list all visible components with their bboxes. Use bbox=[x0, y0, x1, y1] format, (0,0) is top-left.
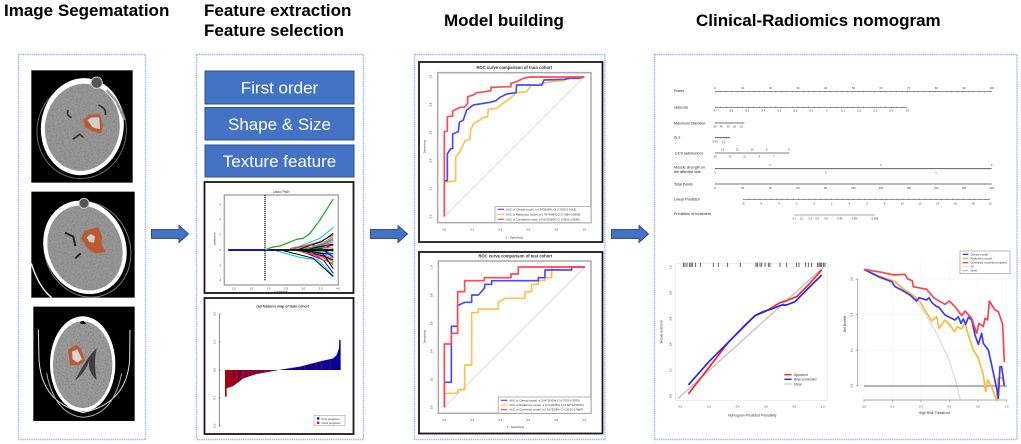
chart: ROC test cohort: 0.0 bbox=[442, 418, 447, 422]
feature box: shape and size bbox=[205, 108, 354, 140]
chart: nomogram: 6 bbox=[866, 201, 868, 205]
chart: ROC train cohort: 0.6 bbox=[429, 130, 433, 135]
chart: lasso path: 2.0 bbox=[267, 286, 271, 290]
chart: decision curve: 0.2 bbox=[890, 404, 895, 408]
chart: ROC test cohort: ROC curve comparison of test cohort bbox=[478, 254, 553, 259]
chart: ROC test cohort: 1.0 bbox=[582, 418, 587, 422]
chart: decision curve: All bbox=[970, 265, 974, 269]
chart: nomogram: 10 bbox=[740, 124, 743, 128]
chart: ROC test cohort: 0.8 bbox=[554, 418, 559, 422]
feature box: shape and size: Shape & Size bbox=[228, 115, 331, 134]
chart: nomogram: 40 bbox=[824, 86, 828, 90]
chart: nomogram: 0.999 bbox=[872, 216, 879, 220]
chart: nomogram: -0.1 bbox=[809, 109, 814, 113]
chart: nomogram: the affected side bbox=[674, 170, 701, 174]
chart: calibration curve: 0.2 bbox=[707, 404, 711, 408]
chart: nomogram: 120 bbox=[879, 186, 884, 190]
chart: decision curve: Radiomics model bbox=[970, 257, 992, 261]
chart: ROC train cohort: 1.0 bbox=[582, 227, 587, 231]
chart: nomogram: 0 bbox=[991, 163, 993, 167]
chart: nomogram: 9 bbox=[759, 155, 761, 159]
chart: calibration curve: 0.0 bbox=[678, 404, 683, 408]
chart: ROC train cohort: Sensitivity bbox=[422, 139, 426, 153]
chart: lasso path: Lasso Path bbox=[273, 190, 289, 194]
chart: decision curve: Net Benefit bbox=[843, 316, 847, 332]
chart: ROC train cohort: 1.0 bbox=[429, 74, 433, 79]
chart: nomogram: 0.3 bbox=[873, 109, 877, 113]
chart: nomogram: 0.99 bbox=[852, 216, 857, 220]
title: model building: Model building bbox=[444, 11, 564, 30]
chart: nomogram: 12 bbox=[736, 147, 739, 151]
chart: decision curve: 0.4 bbox=[919, 404, 923, 408]
chart: lasso path: 3.0 bbox=[301, 286, 306, 290]
chart: nomogram: 0 bbox=[714, 86, 716, 90]
chart: nomogram: 14 bbox=[721, 147, 725, 151]
chart: calibration curve: Ideal bbox=[794, 382, 802, 386]
chart: lasso path: coefficients bbox=[212, 232, 216, 246]
chart: calibration curve: 0.4 bbox=[736, 404, 740, 408]
chart: decision curve bbox=[843, 251, 1010, 415]
chart: lasso path: 3.5 bbox=[319, 286, 323, 290]
CT scan 3 bbox=[33, 307, 135, 421]
chart: ROC test cohort: 0.0 bbox=[429, 405, 433, 409]
chart: calibration curve: 0.2 bbox=[669, 368, 673, 372]
chart: nomogram: 12 bbox=[918, 201, 922, 205]
chart: nomogram: 0.1 bbox=[792, 216, 797, 220]
chart: nomogram: -0.4 bbox=[761, 109, 766, 113]
feature box: texture feature: Texture feature bbox=[223, 152, 336, 171]
chart: rad features map: rad features map of train cohort bbox=[256, 305, 310, 309]
chart: lasso path: -2 bbox=[219, 263, 222, 267]
chart: lasso path bbox=[204, 182, 354, 294]
chart: nomogram: 0 bbox=[826, 109, 828, 113]
chart: calibration curve: Actual outcome bbox=[659, 320, 663, 343]
chart: nomogram: 160 bbox=[934, 186, 939, 190]
chart: nomogram: 50 bbox=[852, 86, 855, 90]
chart: nomogram: 0.2 bbox=[800, 216, 804, 220]
chart: rad features map: -0.2 bbox=[212, 423, 216, 428]
chart: decision curve: 0.0 bbox=[862, 404, 866, 408]
chart: nomogram: 16 bbox=[954, 201, 957, 205]
chart: ROC train cohort: AUC of Clinical model: a 0.8439(95% CI 0.7910-0.9165) bbox=[506, 207, 576, 211]
chart: nomogram: 8 bbox=[884, 201, 886, 205]
chart: ROC test cohort: 0.6 bbox=[526, 418, 531, 422]
chart: ROC test cohort: 0.4 bbox=[429, 349, 433, 353]
chart: nomogram: Points bbox=[674, 89, 684, 93]
chart: nomogram: 2 bbox=[880, 163, 882, 167]
chart: decision curve: 0.2 bbox=[849, 348, 853, 352]
chart: calibration curve: 0.6 bbox=[764, 404, 768, 408]
chart: lasso path: 2 bbox=[219, 233, 221, 237]
chart: nomogram: 200 bbox=[989, 186, 994, 190]
chart: nomogram: Linear Predictor bbox=[674, 198, 701, 202]
chart: nomogram: 0.5 bbox=[905, 109, 910, 113]
chart: calibration curve: 0.8 bbox=[792, 404, 797, 408]
chart: decision curve: 0.4 bbox=[849, 312, 853, 317]
arrow: segmentation to features bbox=[152, 226, 188, 242]
chart: lasso path: 0 bbox=[219, 248, 221, 252]
chart: nomogram: 0 bbox=[714, 186, 716, 190]
chart: nomogram: 14 bbox=[936, 201, 940, 205]
chart: rad features map: -0.1 bbox=[212, 395, 216, 400]
chart: ROC test cohort: AUC of Clinical model: a 0.8475(95% CI 0.7570-0.9520) bbox=[509, 398, 580, 402]
chart: ROC test cohort: Sensitivity bbox=[423, 329, 427, 343]
panel: clinical-radiomics nomogram bbox=[654, 54, 1017, 440]
chart: ROC test cohort: AUC of Radiomics model: a 0.7743(95% CI 0.6872-0.8676) bbox=[509, 403, 584, 407]
chart: calibration curve: 0.4 bbox=[669, 342, 673, 346]
chart: nomogram: 0.95 bbox=[837, 216, 843, 220]
chart: calibration curve: 1.0 bbox=[821, 404, 825, 408]
chart: rad features map: 0.2 bbox=[212, 312, 216, 316]
chart: ROC test cohort bbox=[419, 252, 602, 434]
chart: nomogram: 80 bbox=[935, 86, 938, 90]
chart: nomogram: -2 bbox=[795, 201, 798, 205]
CT scan 1 bbox=[31, 70, 133, 184]
chart: nomogram: 1 bbox=[935, 170, 937, 174]
chart: ROC train cohort: ROC curve comparison of train cohort bbox=[477, 65, 553, 70]
chart: nomogram: 0.4 bbox=[808, 216, 813, 220]
chart: calibration curve: Apparent bbox=[794, 373, 808, 377]
chart: ROC train cohort: 0.4 bbox=[429, 158, 433, 163]
chart: ROC train cohort bbox=[419, 62, 602, 242]
chart: ROC test cohort: 0.6 bbox=[429, 321, 433, 325]
feature box: texture feature bbox=[205, 145, 354, 177]
chart: decision curve: 0.6 bbox=[947, 404, 952, 408]
chart: nomogram: Maximum Diameter bbox=[674, 121, 706, 125]
arrow: model to nomogram bbox=[612, 226, 648, 242]
chart: decision curve: 0.6 bbox=[849, 277, 853, 281]
chart: ROC train cohort: AUC of Combined model: a 0.9225(95% CI 0.8811-0.9645) bbox=[506, 217, 580, 221]
chart: ROC train cohort: 0.4 bbox=[498, 227, 503, 231]
chart: nomogram: 90 bbox=[962, 86, 966, 90]
chart: lasso path: 1.5 bbox=[249, 286, 254, 290]
chart: nomogram: 4 bbox=[769, 163, 771, 167]
chart: nomogram: 40 bbox=[769, 186, 772, 190]
chart: nomogram bbox=[674, 86, 994, 220]
chart: nomogram: 180 bbox=[962, 186, 967, 190]
chart: nomogram: 20 bbox=[733, 124, 737, 128]
chart: nomogram: -0.5 bbox=[745, 109, 750, 113]
chart: lasso path: 4 bbox=[219, 218, 221, 222]
chart: ROC train cohort: 1 - Specificity bbox=[505, 236, 524, 240]
chart: decision curve: Combined model(nomogram) bbox=[970, 261, 1007, 265]
chart: nomogram: 0.08 bbox=[712, 139, 718, 143]
chart: nomogram: 20 bbox=[769, 86, 772, 90]
chart: calibration curve: Bias-corrected bbox=[794, 378, 817, 382]
chart: calibration curve: 0.8 bbox=[669, 291, 673, 295]
chart: nomogram: -0.7 bbox=[713, 109, 718, 113]
chart: rad features map: Good prognosis bbox=[322, 421, 341, 425]
chart: nomogram: Muscle strength on bbox=[674, 166, 705, 170]
chart: decision curve: None bbox=[970, 269, 978, 273]
chart: ROC test cohort: 0.2 bbox=[470, 418, 475, 422]
chart: nomogram: -0.3 bbox=[777, 109, 782, 113]
chart: nomogram: 18 bbox=[971, 201, 975, 205]
chart: rad features map bbox=[204, 298, 354, 434]
chart: lasso path: Log(lambda) bbox=[274, 291, 288, 294]
chart: nomogram: 30 bbox=[797, 86, 800, 90]
arrow: features to model bbox=[370, 226, 408, 242]
chart: nomogram: -6 bbox=[760, 201, 763, 205]
chart: nomogram: 10 bbox=[751, 147, 754, 151]
chart: ROC train cohort: 0.0 bbox=[429, 214, 433, 219]
chart: rad features map: 0.0 bbox=[212, 368, 216, 372]
title: image segmentation: Image Segematation bbox=[4, 1, 169, 20]
chart: nomogram: -4 bbox=[777, 201, 780, 205]
chart: calibration curve: 1.0 bbox=[669, 265, 673, 269]
title: feature extraction and selection: Feature selection bbox=[204, 21, 344, 40]
chart: rad features map: Poor prognosis bbox=[322, 417, 340, 421]
chart: decision curve: Clinical model bbox=[970, 252, 988, 256]
chart: nomogram: -8 bbox=[742, 201, 745, 205]
feature box: first order bbox=[205, 71, 354, 104]
chart: ROC test cohort: 0.8 bbox=[429, 293, 433, 297]
chart: lasso path: 2.5 bbox=[284, 286, 288, 290]
chart: nomogram: 7 bbox=[773, 155, 775, 159]
chart: nomogram: -0.6 bbox=[729, 109, 734, 113]
chart: nomogram: 60 bbox=[797, 186, 800, 190]
chart: ROC test cohort: 1 - Specificity bbox=[506, 425, 525, 429]
chart: nomogram: radscore bbox=[674, 105, 688, 109]
chart: ROC train cohort: 0.2 bbox=[470, 227, 475, 231]
chart: lasso path: 4.0 bbox=[336, 286, 340, 290]
chart: nomogram: 80 bbox=[824, 186, 828, 190]
chart: nomogram: 100 bbox=[989, 86, 994, 90]
panel: image segmentation bbox=[18, 54, 146, 440]
chart: decision curve: High Risk Threshold bbox=[919, 411, 950, 415]
title: feature extraction and selection: Feature extraction bbox=[204, 1, 351, 20]
chart: ROC test cohort: 1.0 bbox=[429, 265, 433, 269]
chart: ROC train cohort: AUC of Radiomics model: a 0.7874(95% CI 0.7084-0.8665) bbox=[506, 212, 580, 216]
chart: nomogram: Total Points bbox=[674, 182, 693, 186]
chart: nomogram: 30 bbox=[727, 124, 730, 128]
chart: nomogram: 140 bbox=[906, 186, 911, 190]
chart: nomogram: Prediction of treatment bbox=[674, 212, 711, 216]
chart: nomogram: 10 bbox=[901, 201, 904, 205]
chart: nomogram: 70 bbox=[907, 86, 911, 90]
chart: nomogram: 0.6 bbox=[815, 216, 820, 220]
chart: nomogram: 15 bbox=[714, 155, 717, 159]
chart: nomogram: 50 bbox=[714, 124, 717, 128]
chart: ROC test cohort: 0.4 bbox=[498, 418, 503, 422]
panel: feature extraction and selection bbox=[196, 54, 364, 440]
chart: nomogram: -0.2 bbox=[793, 109, 798, 113]
chart: nomogram: 40 bbox=[720, 124, 723, 128]
chart: nomogram: 5 bbox=[714, 170, 716, 174]
chart: nomogram: 5 bbox=[788, 147, 790, 151]
chart: lasso path: 1.0 bbox=[232, 286, 236, 290]
chart: nomogram: 0.1 bbox=[841, 109, 845, 113]
title: clinical-radiomics nomogram: Clinical-Radiomics nomogram bbox=[696, 11, 941, 30]
chart: nomogram: 0 bbox=[813, 201, 815, 205]
chart: decision curve: 0.0 bbox=[849, 383, 853, 388]
chart: decision curve: 0.8 bbox=[976, 404, 980, 408]
panel: model building bbox=[414, 54, 605, 440]
CT scan 2 bbox=[29, 188, 145, 310]
chart: nomogram: 60 bbox=[879, 86, 883, 90]
chart: lasso path: -4 bbox=[219, 278, 222, 282]
chart: calibration curve bbox=[659, 263, 827, 418]
chart: lasso path: 6 bbox=[219, 203, 221, 207]
chart: calibration curve: 0.0 bbox=[669, 394, 673, 398]
chart: nomogram: 2 bbox=[831, 201, 833, 205]
chart: calibration curve: 0.6 bbox=[669, 316, 673, 321]
chart: nomogram: 10 bbox=[741, 86, 745, 90]
chart: nomogram: PLT bbox=[674, 136, 681, 140]
chart: nomogram: 0.2 bbox=[857, 109, 861, 113]
chart: nomogram: 20 bbox=[741, 186, 745, 190]
chart: nomogram: GCS (admission) bbox=[675, 151, 703, 155]
chart: ROC test cohort: 0.2 bbox=[429, 377, 433, 381]
chart: calibration curve: Nomogram-Predicted Probability bbox=[728, 414, 777, 418]
chart: ROC train cohort: 0.8 bbox=[554, 227, 559, 231]
feature box: first order: First order bbox=[241, 78, 319, 98]
chart: ROC train cohort: 0.2 bbox=[429, 186, 433, 191]
chart: rad features map: 0.1 bbox=[212, 340, 216, 344]
chart: nomogram: 0.2 bbox=[722, 139, 726, 143]
chart: nomogram: 0.8 bbox=[824, 216, 828, 220]
chart: nomogram: 3 bbox=[825, 170, 827, 174]
chart: ROC train cohort: 0.6 bbox=[526, 227, 531, 231]
chart: nomogram: 100 bbox=[851, 186, 856, 190]
chart: ROC train cohort: 0.0 bbox=[442, 227, 447, 231]
chart: nomogram: 8 bbox=[766, 147, 768, 151]
chart: nomogram: 11 bbox=[743, 155, 747, 159]
chart: ROC train cohort: 0.8 bbox=[429, 102, 433, 107]
chart: ROC test cohort: AUC of Combined model: a 0.9176(95% CI 0.8510-0.9887) bbox=[509, 408, 583, 412]
chart: nomogram: 13 bbox=[729, 155, 732, 159]
chart: nomogram: 0.4 bbox=[889, 109, 893, 113]
chart: decision curve: 1.0 bbox=[1005, 404, 1009, 408]
chart: nomogram: 4 bbox=[849, 201, 851, 205]
chart: nomogram: 20 bbox=[988, 201, 992, 205]
